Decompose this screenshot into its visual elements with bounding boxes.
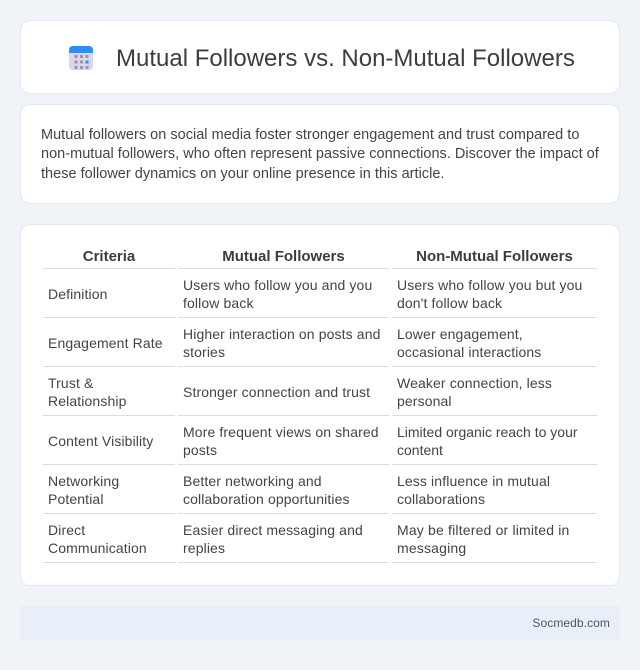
table card — [20, 224, 620, 586]
icon: calendar — [69, 46, 93, 70]
row: networking potential: Potential — [48, 491, 104, 507]
intro text: Mutual followers on social media foster stronger engagement and trust compared to — [41, 126, 579, 142]
row: content visibility — [48, 424, 578, 458]
row: engagement rate: Engagement Rate — [48, 335, 163, 351]
row: trust and relationship: Relationship — [48, 393, 126, 409]
row: content visibility: posts — [183, 442, 217, 458]
row: engagement rate: occasional interactions — [397, 344, 541, 360]
row: trust and relationship: Weaker connection, less — [397, 375, 552, 391]
row: definition: follow back — [183, 295, 254, 311]
header card — [20, 20, 620, 94]
row: direct communication — [48, 522, 570, 556]
row: engagement rate: stories — [183, 344, 225, 360]
row: engagement rate — [48, 326, 541, 360]
row: content visibility: Content Visibility — [48, 433, 153, 449]
row: networking potential: Better networking and — [183, 473, 322, 489]
row: direct communication: Direct — [48, 522, 85, 538]
row: direct communication: messaging — [397, 540, 466, 556]
row: definition: Users who follow you but you — [397, 277, 582, 293]
row: definition: Users who follow you and you — [183, 277, 372, 293]
row: definition: don't follow back — [397, 295, 502, 311]
intro text — [41, 126, 599, 182]
intro card — [20, 104, 620, 204]
footer bar — [20, 606, 620, 640]
row: definition — [48, 277, 582, 311]
row: direct communication: May be filtered or limited in — [397, 522, 570, 538]
row: direct communication: Easier direct messaging and — [183, 522, 363, 538]
row: direct communication: replies — [183, 540, 225, 556]
row: trust and relationship — [48, 375, 552, 409]
column headers: Criteria — [83, 248, 135, 265]
row: trust and relationship: personal — [397, 393, 452, 409]
footer credit: Socmedb.com — [532, 616, 610, 630]
intro text: these follower dynamics on your online presence in this article. — [41, 166, 444, 182]
row: networking potential: Networking — [48, 473, 119, 489]
column headers — [83, 248, 573, 265]
row: content visibility: content — [397, 442, 443, 458]
row: content visibility: More frequent views on shared — [183, 424, 379, 440]
row: networking potential: collaborations — [397, 491, 485, 507]
row: networking potential: Less influence in mutual — [397, 473, 550, 489]
title: Mutual Followers vs. Non-Mutual Followers — [116, 45, 575, 72]
column headers: Non-Mutual Followers — [416, 248, 573, 265]
row: direct communication: Communication — [48, 540, 147, 556]
row: trust and relationship: Stronger connection and trust — [183, 384, 370, 400]
row: networking potential — [48, 473, 550, 507]
row: networking potential: collaboration opportunities — [183, 491, 350, 507]
row: content visibility: Limited organic reach to your — [397, 424, 578, 440]
row: trust and relationship: Trust & — [48, 375, 93, 391]
row: definition: Definition — [48, 286, 108, 302]
row: engagement rate: Lower engagement, — [397, 326, 523, 342]
column headers: Mutual Followers — [222, 248, 345, 265]
intro text: non-mutual followers, who often represent passive connections. Discover the impact of — [41, 146, 599, 162]
row: engagement rate: Higher interaction on posts and — [183, 326, 381, 342]
